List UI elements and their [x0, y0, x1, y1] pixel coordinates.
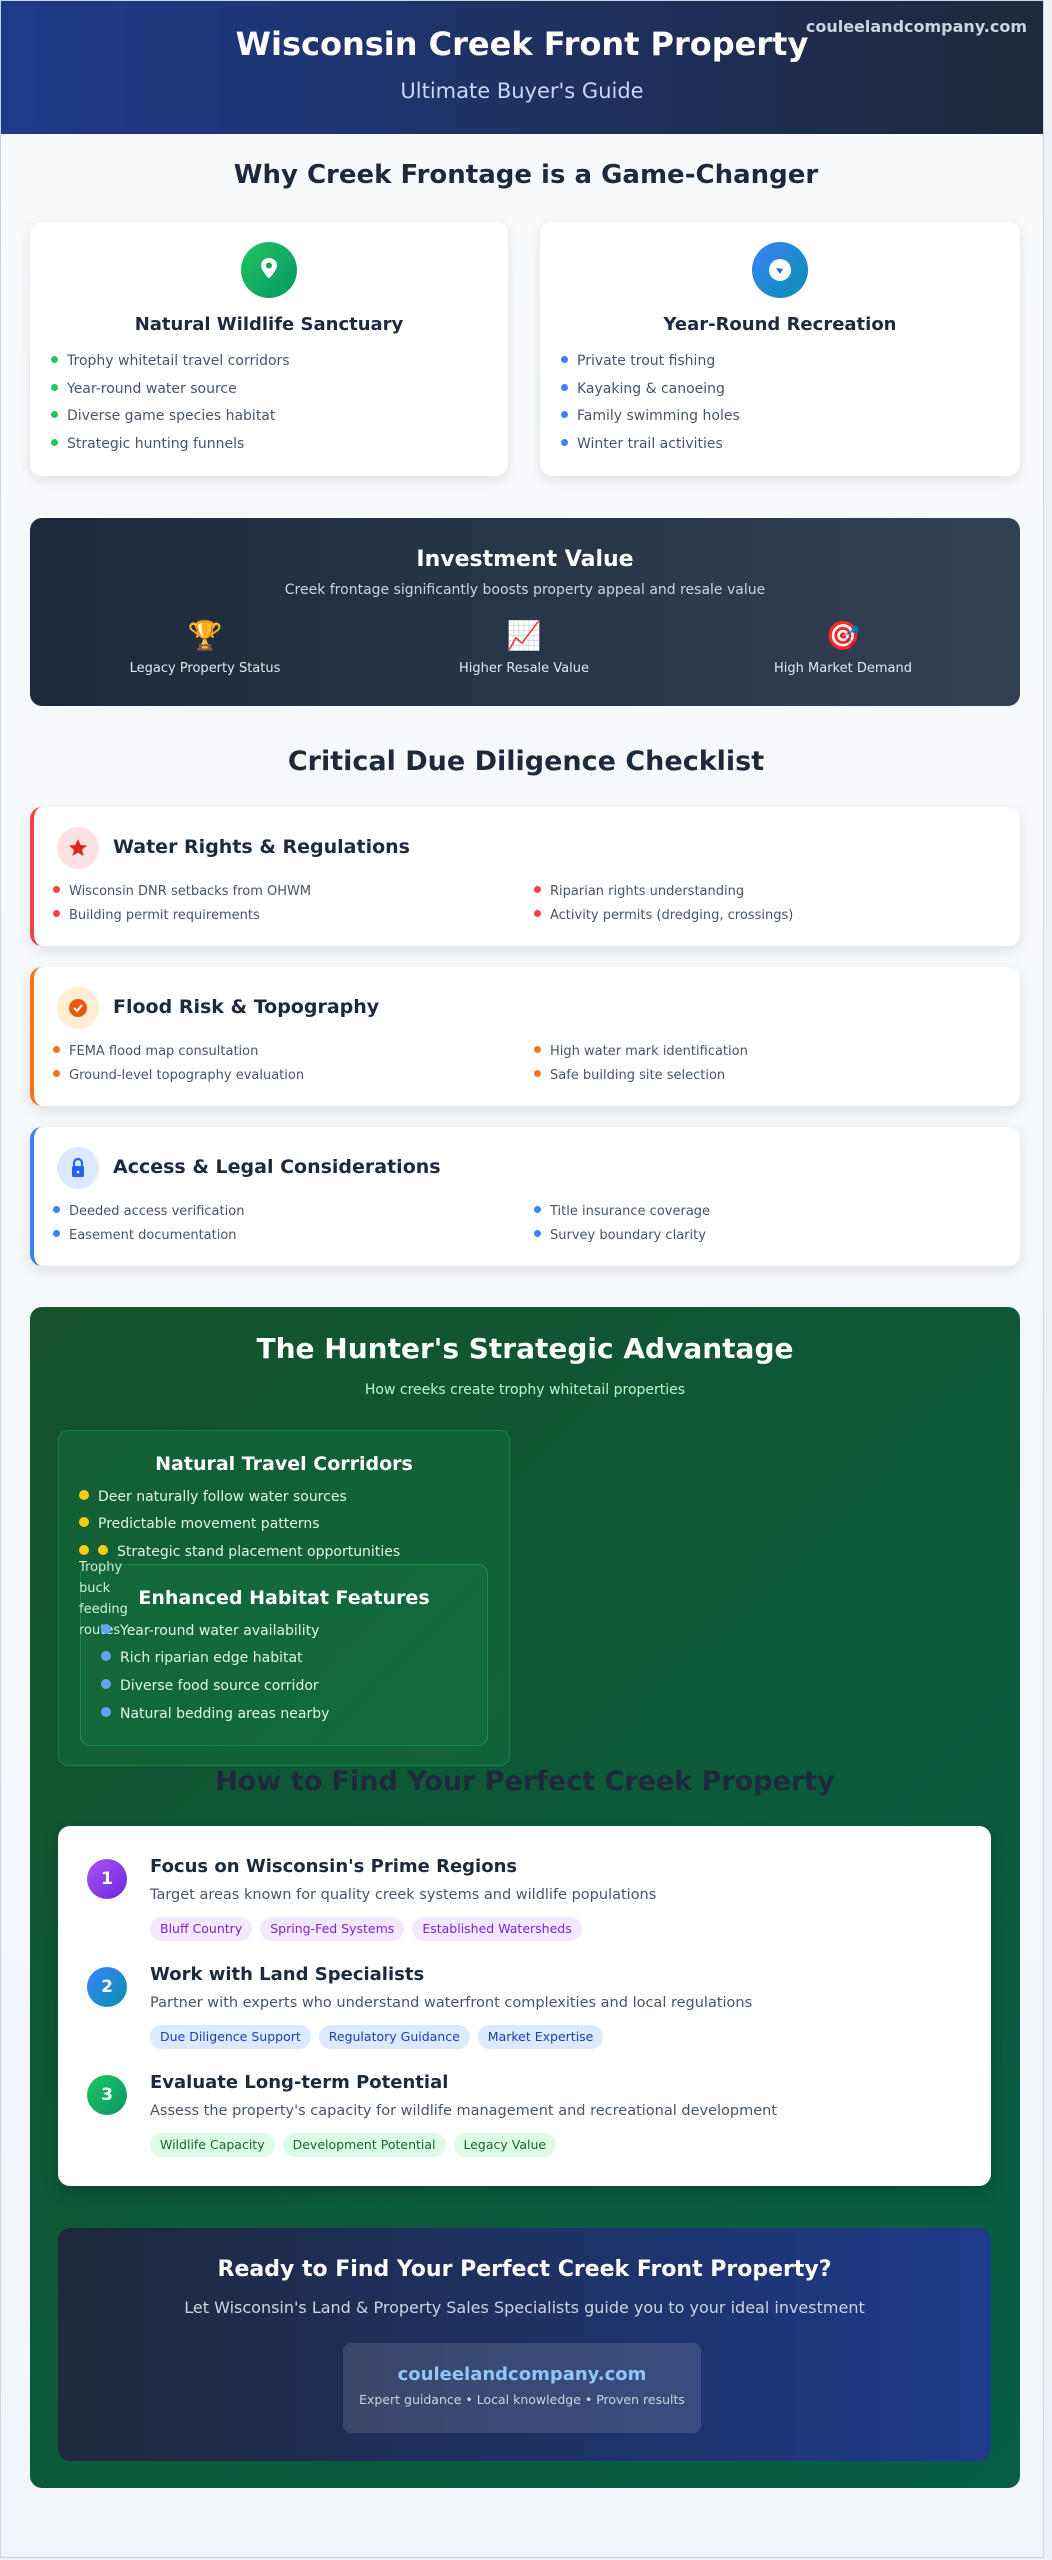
checklist: water rights: Water Rights & Regulations — [113, 836, 410, 858]
item: demand: 🎯 — [826, 619, 860, 652]
item: resale — [459, 619, 589, 676]
text: trophy buck feeding routes: Trophy buck feeding routes — [79, 1560, 128, 1638]
step 2: Work with Land Specialists — [150, 1964, 424, 1985]
item: legacy — [130, 619, 280, 676]
card: enhanced habitat — [80, 1564, 488, 1746]
list — [51, 353, 290, 452]
card: enhanced habitat: Natural bedding areas nearby — [120, 1706, 329, 1722]
list: Trophy whitetail travel corridors — [67, 353, 290, 369]
checklist: water rights — [30, 807, 1020, 946]
step 2 — [87, 1964, 752, 2049]
step 1: Spring-Fed Systems — [270, 1921, 394, 1936]
card: natural travel corridors: Strategic stand placement opportunities — [117, 1544, 400, 1560]
step 1: 1 — [101, 1869, 113, 1889]
list: Kayaking & canoeing — [577, 381, 725, 397]
card title: Natural Wildlife Sanctuary — [135, 314, 403, 335]
subtitle: How creeks create trophy whitetail properties — [365, 1382, 685, 1398]
icon: location pin — [241, 242, 297, 298]
step 3: Legacy Value — [464, 2137, 546, 2152]
domain tag: couleelandcompany.com — [806, 17, 1027, 36]
CTA panel — [58, 2228, 991, 2461]
step 2: Due Diligence Support — [160, 2029, 301, 2044]
icon: check — [57, 987, 99, 1029]
title: Wisconsin Creek Front Property — [236, 25, 808, 63]
item: legacy: 🏆 — [188, 619, 222, 652]
item: legacy: Legacy Property Status — [130, 661, 280, 676]
checklist: access legal: Survey boundary clarity — [550, 1228, 706, 1243]
checklist: water rights: Riparian rights understanding — [550, 884, 744, 899]
list: Diverse game species habitat — [67, 408, 275, 424]
card: natural travel corridors — [58, 1430, 510, 1766]
checklist: access legal — [30, 1127, 1020, 1266]
subtitle: Ultimate Buyer's Guide — [400, 79, 644, 103]
CTA panel: Ready to Find Your Perfect Creek Front Property? — [218, 2257, 831, 2282]
heading: how to find: How to Find Your Perfect Creek Property — [215, 1766, 835, 1797]
step 3: Evaluate Long-term Potential — [150, 2072, 448, 2093]
checklist: access legal: Easement documentation — [69, 1228, 237, 1243]
checklist: access legal: Access & Legal Considerations — [113, 1156, 441, 1178]
card title: Year-Round Recreation — [663, 314, 896, 335]
contact box: Expert guidance • Local knowledge • Proven results — [359, 2392, 685, 2407]
panel: investment value — [30, 518, 1020, 706]
step 1: Established Watersheds — [422, 1921, 572, 1936]
title: Investment Value — [416, 547, 634, 572]
heading: checklist: Critical Due Diligence Checklist — [288, 746, 764, 777]
panel: hunter's strategic advantage — [30, 1307, 1020, 2488]
contact box: couleelandcompany.com — [398, 2364, 646, 2385]
contact box — [343, 2343, 701, 2433]
step 2: 2 — [101, 1977, 113, 1997]
step 2: Partner with experts who understand waterfront complexities and local regulations — [150, 1995, 752, 2011]
card: natural travel corridors: Natural Travel Corridors — [155, 1453, 413, 1475]
heading: why creek frontage: Why Creek Frontage is a Game-Changer — [234, 160, 818, 190]
checklist: flood risk: High water mark identification — [550, 1044, 748, 1059]
step 3: 3 — [101, 2085, 113, 2105]
icon: lock — [57, 1147, 99, 1189]
list: Winter trail activities — [577, 436, 723, 452]
list: Private trout fishing — [577, 353, 715, 369]
checklist: flood risk: FEMA flood map consultation — [69, 1044, 258, 1059]
CTA panel: Let Wisconsin's Land & Property Sales Specialists guide you to your ideal investment — [184, 2298, 865, 2317]
item: resale: 📈 — [507, 619, 541, 652]
checklist: access legal: Title insurance coverage — [550, 1204, 710, 1219]
list — [561, 353, 740, 452]
step 3 — [87, 2072, 777, 2157]
steps card — [58, 1826, 991, 2186]
checklist: flood risk: Ground-level topography evaluation — [69, 1068, 304, 1083]
item: resale: Higher Resale Value — [459, 661, 589, 676]
panel: year-round recreation — [540, 222, 1020, 476]
icon: compass — [752, 242, 808, 298]
list: Year-round water source — [67, 381, 237, 397]
card: natural travel corridors: Deer naturally follow water sources — [98, 1489, 347, 1505]
panel: wildlife sanctuary — [30, 222, 508, 476]
step 1 — [87, 1856, 656, 1941]
checklist: flood risk: Safe building site selection — [550, 1068, 725, 1083]
step 3: Assess the property's capacity for wildlife management and recreational development — [150, 2103, 777, 2119]
subtitle: Creek frontage significantly boosts property appeal and resale value — [285, 582, 765, 598]
checklist: flood risk: Flood Risk & Topography — [113, 996, 379, 1018]
checklist: water rights: Activity permits (dredging, crossings) — [550, 908, 793, 923]
list: Strategic hunting funnels — [67, 436, 244, 452]
item: demand: High Market Demand — [774, 661, 912, 676]
item: demand — [774, 619, 912, 676]
step 1: Focus on Wisconsin's Prime Regions — [150, 1856, 517, 1877]
card: natural travel corridors: Predictable movement patterns — [98, 1516, 320, 1532]
card: enhanced habitat: Enhanced Habitat Features — [138, 1587, 430, 1609]
checklist: access legal: Deeded access verification — [69, 1204, 244, 1219]
checklist: flood risk — [30, 967, 1020, 1106]
step 2: Regulatory Guidance — [329, 2029, 460, 2044]
step 1: Bluff Country — [160, 1921, 242, 1936]
checklist: water rights: Building permit requirements — [69, 908, 260, 923]
checklist: water rights: Wisconsin DNR setbacks from OHWM — [69, 884, 311, 899]
icon: star — [57, 827, 99, 869]
header — [1, 1, 1043, 134]
list: Family swimming holes — [577, 408, 740, 424]
card: enhanced habitat: Rich riparian edge habitat — [120, 1650, 303, 1666]
step 3: Wildlife Capacity — [160, 2137, 265, 2152]
step 1: Target areas known for quality creek systems and wildlife populations — [150, 1887, 656, 1903]
step 2: Market Expertise — [488, 2029, 593, 2044]
step 3: Development Potential — [293, 2137, 436, 2152]
title: The Hunter's Strategic Advantage — [257, 1332, 793, 1365]
card: enhanced habitat: Diverse food source corridor — [120, 1678, 319, 1694]
card: enhanced habitat: Year-round water availability — [120, 1623, 319, 1639]
